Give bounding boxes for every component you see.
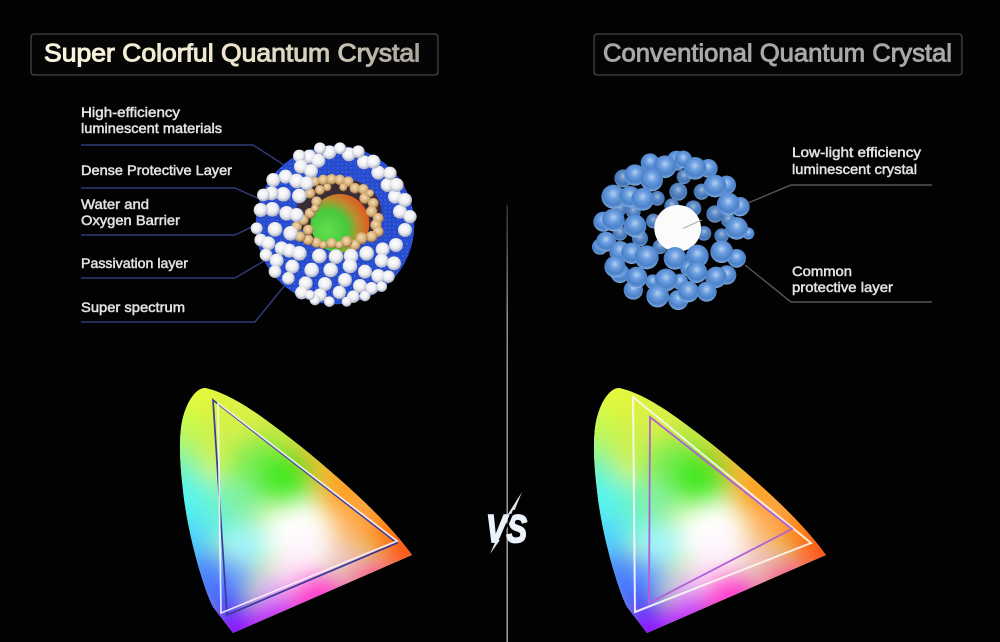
- label: Dense Protective Layer: [81, 162, 262, 200]
- chromaticity diagram: super colorful: [149, 361, 436, 642]
- title: Conventional Quantum Crystal: Conventional Quantum Crystal: [603, 40, 952, 68]
- label: Water and Oxygen Barrier: Water and: [81, 196, 149, 212]
- triangle: super spectrum outline white: [218, 403, 397, 613]
- label: High-efficiency luminescent materials: High-efficiency: [81, 104, 180, 120]
- label: Common protective layer: protective layer: [792, 279, 893, 295]
- label: Super spectrum: [81, 285, 285, 322]
- label: Common protective layer: Common: [792, 263, 852, 279]
- label: Low-light efficiency luminescent crystal: [748, 144, 932, 203]
- triangle: reference gamut outline white: [633, 397, 811, 612]
- vertical divider line: [506, 205, 508, 642]
- VS badge: VS: [486, 508, 527, 551]
- title: Conventional Quantum Crystal: [594, 34, 962, 75]
- illustration: super colorful quantum crystal: [251, 142, 417, 307]
- label: Passivation layer: Passivation layer: [81, 255, 188, 271]
- label: High-efficiency luminescent materials: [81, 104, 295, 172]
- label: Passivation layer: [81, 255, 264, 278]
- label: Water and Oxygen Barrier: [81, 196, 262, 235]
- label: Super spectrum: Super spectrum: [81, 299, 185, 315]
- illustration: conventional quantum crystal: [592, 151, 754, 310]
- label: High-efficiency luminescent materials: luminescent materials: [81, 120, 222, 136]
- chromaticity diagram: conventional: [563, 361, 850, 642]
- label: Low-light efficiency luminescent crystal: Low-light efficiency: [792, 144, 921, 160]
- right callout labels: [745, 144, 932, 302]
- left callout labels: [81, 104, 295, 322]
- triangle: wide gamut outline blue: [213, 400, 397, 615]
- label: Low-light efficiency luminescent crystal: luminescent crystal: [792, 161, 917, 177]
- label: Dense Protective Layer: Dense Protective Layer: [81, 162, 232, 178]
- title: Super Colorful Quantum Crystal: Super Colorful Quantum Crystal: [44, 40, 420, 68]
- triangle: conventional gamut outline purple: [649, 417, 792, 603]
- label: Common protective layer: [745, 263, 932, 302]
- label: Water and Oxygen Barrier: Oxygen Barrier: [81, 212, 180, 228]
- VS badge: [486, 492, 527, 554]
- title: Super Colorful Quantum Crystal: [31, 34, 438, 75]
